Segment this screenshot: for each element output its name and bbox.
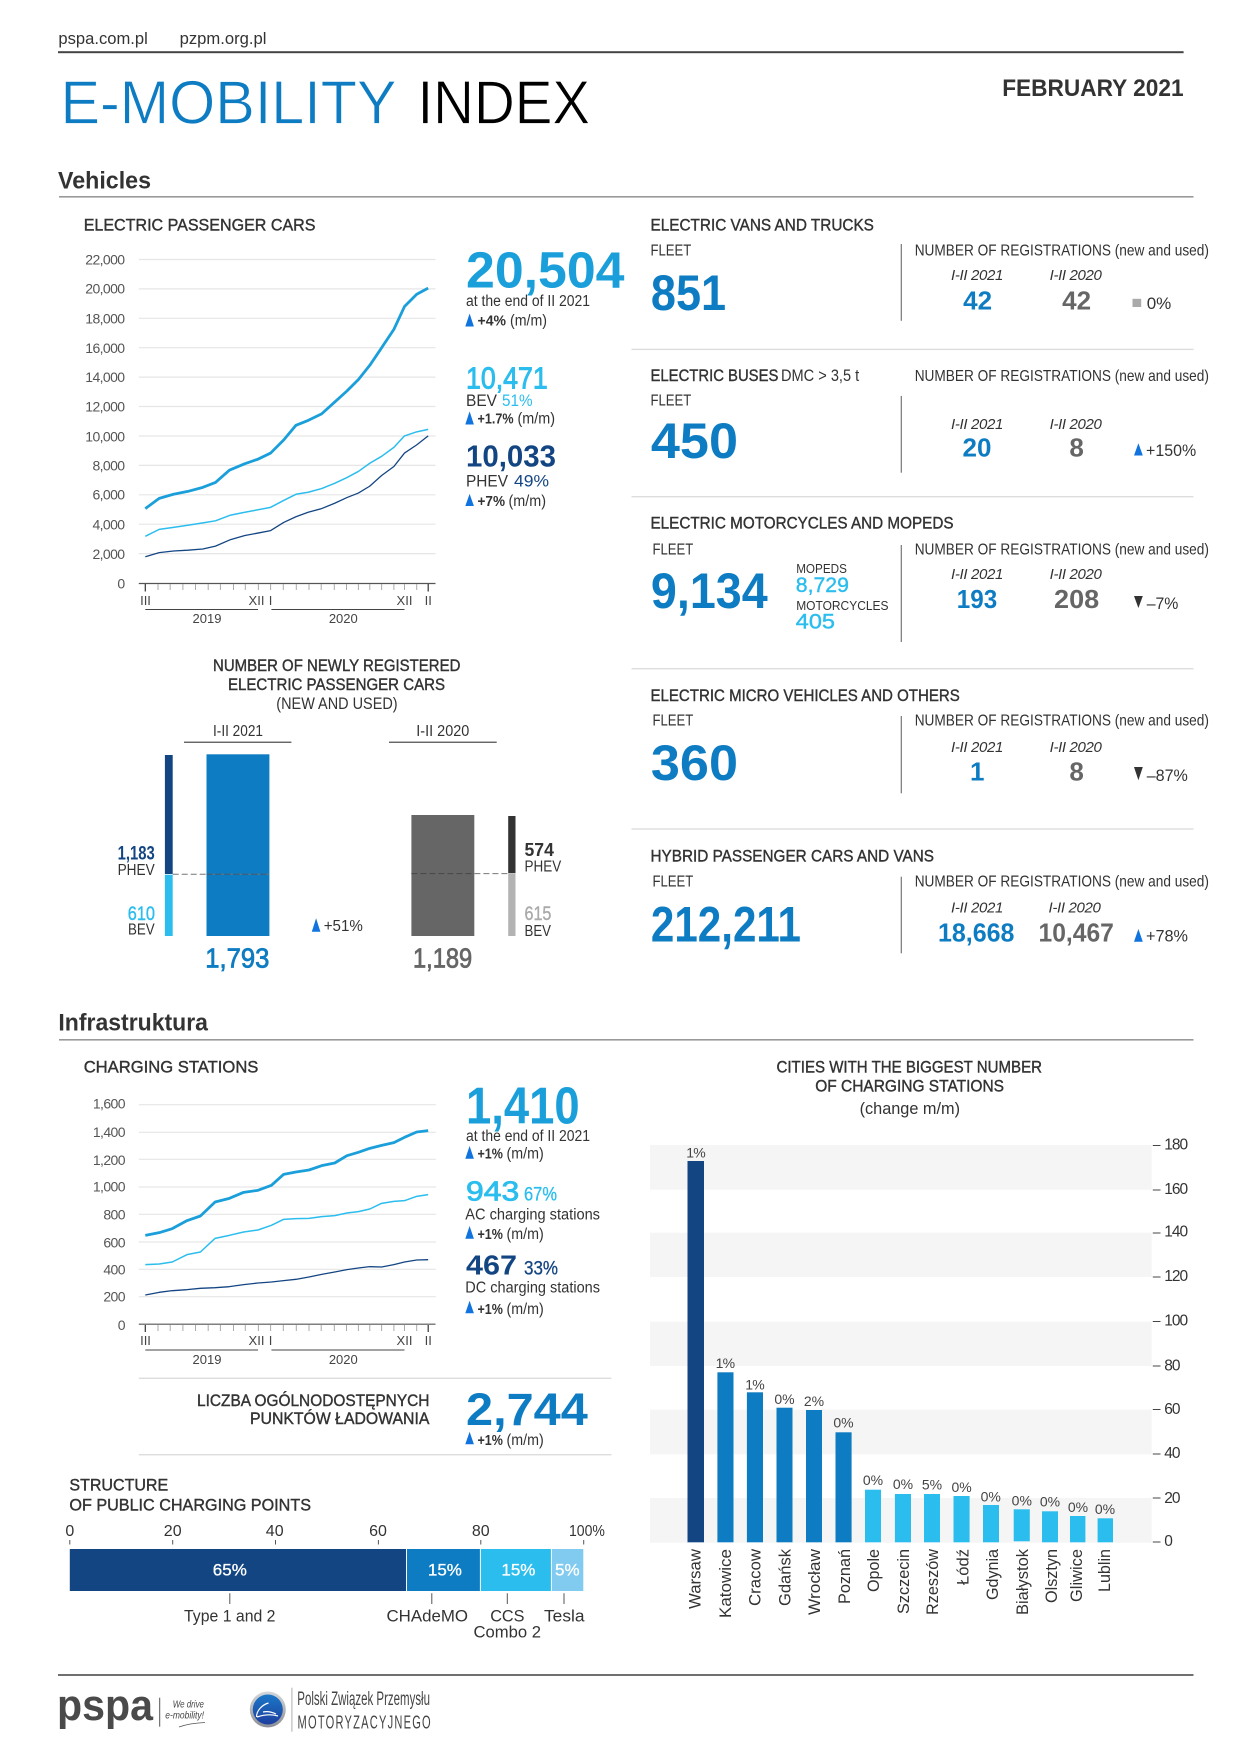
- panel: charging totals: (m/m): [506, 1226, 544, 1243]
- line: BEV: [145, 429, 428, 536]
- chart title: CITIES WITH THE BIGGEST NUMBER: [776, 1058, 1042, 1077]
- x axis labels: I: [269, 1333, 272, 1348]
- percentage labels: 0%: [951, 1479, 972, 1495]
- panel: motorcycles and mopeds: ELECTRIC MOTORCYCLES AND MOPEDS: [650, 514, 954, 533]
- total 1,189: 1,189: [413, 942, 472, 974]
- labels: 2020 split: BEV: [524, 923, 551, 940]
- icon: up triangle: [465, 1301, 474, 1313]
- icon: up triangle: [1134, 443, 1143, 456]
- panel: charging stations chart: [84, 1058, 436, 1367]
- labels: 2021 split: BEV: [128, 921, 155, 938]
- y axis: 160: [1164, 1181, 1189, 1198]
- x axis labels: 2019: [193, 1352, 221, 1367]
- icon: up triangle: [465, 1146, 474, 1159]
- panel: motorcycles and mopeds: I-II 2020: [1050, 566, 1103, 583]
- panel: fleet totals: (m/m): [518, 411, 555, 428]
- icon: no change square: [1132, 299, 1141, 307]
- heading: Infrastruktura: Infrastruktura: [58, 1010, 209, 1037]
- y axis: 100: [1164, 1312, 1189, 1330]
- header links: pspa.com.pl: [58, 30, 148, 48]
- percentage labels: 1%: [716, 1355, 735, 1371]
- labels: 2021 split: PHEV: [118, 862, 155, 879]
- bar labels: CHAdeMO: [386, 1607, 468, 1626]
- y axis: 20: [1164, 1490, 1181, 1507]
- city labels: Gliwice: [1067, 1549, 1086, 1602]
- labels: 2020 split: 574: [524, 840, 554, 860]
- panel: vans and trucks: [650, 216, 1209, 321]
- y axis labels: 12,000: [85, 398, 125, 414]
- chart title: OF CHARGING STATIONS: [815, 1077, 1004, 1096]
- percentage labels: 0%: [893, 1476, 913, 1492]
- city labels: Gdynia: [983, 1548, 1002, 1600]
- percentage labels: 5%: [922, 1477, 942, 1493]
- panel: fleet totals: PHEV: [466, 472, 509, 490]
- panel: cities chart: [650, 1058, 1189, 1618]
- logo: PZPM: [250, 1688, 431, 1733]
- city labels: Gdańsk: [776, 1549, 795, 1606]
- chart title: [776, 1058, 1042, 1118]
- bars: [688, 1161, 1113, 1542]
- mopeds and motorcycles split: 8,729: [796, 574, 849, 597]
- chart title: (NEW AND USED): [276, 694, 398, 713]
- panel: charging totals: (m/m): [506, 1146, 544, 1163]
- icon: up triangle: [465, 1432, 474, 1444]
- x axis labels: II: [425, 593, 432, 608]
- percentage labels: 1%: [745, 1376, 764, 1392]
- total 1,410: 1,410: [466, 1077, 580, 1135]
- chart title: ELECTRIC PASSENGER CARS: [84, 216, 316, 235]
- AC 943: 943: [466, 1176, 519, 1207]
- mopeds and motorcycles split: [796, 561, 889, 634]
- panel: charging totals: AC charging stations: [465, 1206, 600, 1223]
- bar labels: [184, 1607, 585, 1642]
- panel: vans and trucks: I-II 2021: [951, 267, 1003, 284]
- panel: fleet totals: +7%: [478, 493, 505, 510]
- header links: [58, 30, 267, 48]
- y axis labels: 800: [103, 1207, 126, 1223]
- panel: micro vehicles: ELECTRIC MICRO VEHICLES AND OTHERS: [650, 686, 960, 705]
- logo: pspa: We drive: [173, 1700, 204, 1711]
- panel: buses: FLEET: [650, 392, 691, 409]
- x axis labels: III: [140, 593, 151, 608]
- bar labels: Combo 2: [474, 1623, 541, 1642]
- panel: public charging points: PUNKTÓW ŁADOWANIA: [250, 1409, 430, 1428]
- stacked split: 2021: [165, 755, 173, 936]
- labels: 2020 split: [524, 840, 561, 940]
- BEV 10,471: 10,471: [466, 361, 548, 396]
- line: DC: [145, 1260, 428, 1295]
- logo: PZPM: MOTORYZACYJNEGO: [298, 1713, 431, 1733]
- city labels: Warsaw: [686, 1548, 705, 1609]
- x axis labels: III: [140, 1333, 151, 1348]
- icon: up triangle: [465, 411, 474, 424]
- stacked bar: 65%: [213, 1560, 247, 1580]
- y axis labels: [85, 251, 125, 591]
- panel: newly registered cars: I-II 2021: [213, 723, 263, 740]
- fleet value: 450: [651, 413, 738, 469]
- mopeds and motorcycles split: MOPEDS: [796, 561, 847, 576]
- city labels: Wrocław: [805, 1548, 824, 1615]
- title: INDEX: [418, 68, 590, 136]
- panel: motorcycles and mopeds: I-II 2021: [951, 566, 1003, 583]
- axis labels: 40: [266, 1523, 284, 1540]
- stacked bar: [70, 1549, 583, 1591]
- line: total fleet: [145, 288, 428, 509]
- panel: hybrid cars and vans: 18,668: [938, 918, 1014, 948]
- city labels: Poznań: [835, 1549, 854, 1604]
- y axis: 180: [1164, 1136, 1189, 1154]
- panel: charging totals: DC charging stations: [465, 1279, 600, 1296]
- header links: pzpm.org.pl: [180, 30, 266, 48]
- axis labels: 80: [472, 1523, 490, 1540]
- y axis labels: 20,000: [85, 281, 125, 297]
- chart title: [213, 656, 460, 713]
- panel: buses: I-II 2021: [951, 416, 1003, 433]
- panel: fleet totals: +4%: [478, 313, 506, 330]
- panel: structure of public charging points: [65, 1476, 605, 1642]
- logo: PZPM: Polski Związek Przemysłu: [297, 1689, 430, 1710]
- panel: buses: +150%: [1146, 441, 1196, 460]
- bar labels: Tesla: [544, 1607, 585, 1626]
- panel: vans and trucks: 42: [963, 285, 992, 315]
- icon: emblem: [250, 1692, 286, 1728]
- panel: charging totals: 33%: [524, 1258, 558, 1279]
- y axis labels: 4,000: [92, 516, 125, 532]
- change indicator: +51%: [324, 918, 363, 935]
- panel: buses: [650, 366, 1209, 473]
- labels: 2020 split: 615: [524, 904, 551, 925]
- percentage labels: 0%: [1068, 1499, 1088, 1515]
- x axis labels: 2019: [193, 611, 221, 626]
- y axis: 120: [1164, 1268, 1189, 1285]
- y axis: 0: [1164, 1533, 1173, 1550]
- y axis labels: 8,000: [92, 457, 125, 473]
- percentage labels: [686, 1144, 1115, 1517]
- panel: micro vehicles: –87%: [1147, 766, 1188, 785]
- chart title: (change m/m): [860, 1099, 960, 1118]
- city labels: Szczecin: [894, 1549, 913, 1614]
- panel: micro vehicles: I-II 2020: [1050, 739, 1103, 756]
- x axis labels: [140, 593, 432, 626]
- y axis labels: 600: [103, 1234, 126, 1250]
- axis labels: 100%: [569, 1523, 605, 1540]
- date: FEBRUARY 2021: [1002, 75, 1184, 102]
- stacked bar: 5%: [555, 1560, 580, 1580]
- panel: public charging points: +1%: [478, 1432, 503, 1449]
- city labels: Rzeszów: [923, 1548, 942, 1615]
- percentage labels: 0%: [981, 1488, 1001, 1504]
- city labels: [686, 1548, 1114, 1618]
- x axis labels: XII: [249, 1333, 264, 1348]
- panel: vans and trucks: ELECTRIC VANS AND TRUCKS: [650, 216, 874, 235]
- panel: micro vehicles: 8: [1069, 756, 1084, 786]
- chart title: ELECTRIC PASSENGER CARS: [228, 675, 445, 694]
- total 2,744: 2,744: [466, 1384, 588, 1435]
- x axis labels: 2020: [329, 611, 358, 626]
- icon: up triangle: [465, 314, 474, 326]
- panel: micro vehicles: [650, 686, 1209, 793]
- y axis: 60: [1164, 1401, 1181, 1418]
- panel: fleet totals: 49%: [514, 472, 549, 490]
- PHEV 10,033: 10,033: [466, 438, 556, 474]
- panel: buses: 20: [963, 433, 991, 463]
- panel: vans and trucks: 0%: [1147, 294, 1171, 313]
- panel: hybrid cars and vans: FLEET: [652, 874, 693, 891]
- panel: hybrid cars and vans: I-II 2021: [951, 899, 1003, 916]
- y axis labels: 10,000: [85, 428, 125, 444]
- y axis: 140: [1164, 1224, 1189, 1240]
- panel: charging totals: +1%: [478, 1226, 503, 1243]
- panel: electric passenger cars fleet chart: [84, 216, 435, 626]
- percentage labels: 0%: [863, 1472, 883, 1488]
- panel: hybrid cars and vans: [650, 846, 1209, 953]
- panel: charging totals: at the end of II 2021: [466, 1128, 590, 1145]
- panel: motorcycles and mopeds: FLEET: [652, 542, 693, 559]
- stacked bar: 15%: [501, 1560, 535, 1580]
- icon: down triangle: [1134, 767, 1143, 780]
- y axis labels: 200: [103, 1289, 126, 1305]
- axis labels: [65, 1523, 605, 1540]
- panel: hybrid cars and vans: 10,467: [1039, 918, 1114, 948]
- y axis labels: 400: [103, 1261, 126, 1277]
- labels: 2021 split: 1,183: [118, 843, 155, 864]
- city labels: Łódź: [954, 1549, 972, 1585]
- chart title: OF PUBLIC CHARGING POINTS: [69, 1496, 311, 1515]
- y axis labels: 2,000: [92, 546, 125, 562]
- icon: up triangle: [465, 494, 474, 506]
- percentage labels: 0%: [1012, 1492, 1032, 1508]
- panel: fleet totals: (m/m): [508, 493, 546, 510]
- panel: hybrid cars and vans: HYBRID PASSENGER CARS AND VANS: [650, 846, 934, 865]
- percentage labels: 0%: [1040, 1494, 1060, 1510]
- panel: buses: I-II 2020: [1050, 416, 1103, 433]
- y axis: 80: [1164, 1358, 1181, 1374]
- line: AC: [145, 1195, 428, 1265]
- total 20,504: 20,504: [466, 241, 625, 298]
- percentage labels: 1%: [686, 1144, 705, 1160]
- percentage labels: 0%: [833, 1415, 854, 1431]
- panel: vans and trucks: FLEET: [650, 242, 691, 260]
- panel: motorcycles and mopeds: 193: [957, 584, 997, 614]
- panel: public charging points: [197, 1384, 588, 1449]
- percentage labels: 0%: [774, 1391, 795, 1407]
- panel: vans and trucks: I-II 2020: [1050, 267, 1103, 284]
- fleet value: 9,134: [651, 563, 768, 619]
- y axis labels: 22,000: [85, 251, 125, 267]
- chart title: NUMBER OF NEWLY REGISTERED: [213, 656, 460, 675]
- panel: charging totals: (m/m): [506, 1301, 544, 1318]
- logo: pspa: pspa: [57, 1681, 153, 1730]
- chart title: [69, 1476, 311, 1515]
- title: [60, 68, 590, 136]
- panel: fleet totals: +1.7%: [478, 411, 514, 428]
- y axis: [1153, 1136, 1189, 1550]
- panel: hybrid cars and vans: I-II 2020: [1049, 899, 1101, 916]
- city labels: Cracow: [746, 1548, 765, 1606]
- heading: Vehicles: Vehicles: [58, 168, 151, 195]
- panel: vans and trucks: 42: [1062, 285, 1091, 315]
- stacked bar: 15%: [428, 1560, 462, 1580]
- DC 467: 467: [466, 1249, 517, 1280]
- fleet value: 212,211: [651, 897, 801, 953]
- title: E-MOBILITY: [60, 68, 396, 136]
- panel: hybrid cars and vans: +78%: [1146, 927, 1188, 946]
- bar labels: Type 1 and 2: [184, 1607, 276, 1626]
- x axis labels: [140, 1333, 432, 1367]
- y axis labels: 18,000: [85, 310, 125, 326]
- mopeds and motorcycles split: 405: [796, 611, 835, 634]
- y axis labels: 1,200: [93, 1152, 126, 1168]
- y axis labels: [93, 1096, 126, 1333]
- y axis labels: 6,000: [92, 487, 125, 503]
- panel: public charging points: (m/m): [506, 1432, 544, 1449]
- x axis labels: XII: [397, 593, 412, 608]
- panel: buses: ELECTRIC BUSES: [650, 366, 778, 385]
- panel: buses: 8: [1069, 433, 1084, 463]
- x axis labels: 2020: [329, 1352, 358, 1367]
- y axis labels: 1,000: [93, 1178, 126, 1194]
- labels: 2021 split: 610: [128, 904, 155, 925]
- percentage labels: 2%: [804, 1393, 824, 1409]
- stacked split: 2020: [508, 816, 516, 936]
- panel: charging totals: +1%: [478, 1301, 503, 1318]
- mopeds and motorcycles split: MOTORCYCLES: [796, 598, 889, 613]
- icon: up triangle: [1134, 929, 1143, 942]
- line: PHEV: [145, 436, 428, 557]
- city labels: Olsztyn: [1042, 1549, 1061, 1603]
- logo: pspa: [57, 1681, 205, 1730]
- y axis labels: 0: [117, 575, 125, 591]
- panel: charging totals: +1%: [478, 1146, 503, 1163]
- labels: 2021 split: [118, 843, 155, 938]
- x axis labels: XII: [249, 593, 264, 608]
- bar labels: CCS: [490, 1607, 524, 1626]
- axis labels: 60: [369, 1523, 387, 1540]
- city labels: Lublin: [1095, 1549, 1114, 1592]
- panel: charging totals: 67%: [524, 1185, 557, 1206]
- logo: pspa: e-mobility!: [165, 1710, 204, 1721]
- y axis labels: 1,400: [93, 1124, 126, 1140]
- x axis labels: II: [425, 1333, 432, 1348]
- y axis labels: 1,600: [93, 1096, 126, 1112]
- panel: charging totals: [465, 1077, 600, 1318]
- panel: fleet totals: BEV: [466, 391, 498, 410]
- chart title: CHARGING STATIONS: [84, 1058, 258, 1077]
- bar: 2020 total: [411, 815, 474, 936]
- bar: 2021 total: [206, 754, 269, 936]
- y axis labels: 16,000: [85, 340, 125, 356]
- panel: motorcycles and mopeds: [650, 514, 1209, 642]
- panel: micro vehicles: 1: [970, 756, 984, 786]
- percentage labels: 0%: [1095, 1501, 1115, 1517]
- city labels: Katowice: [716, 1549, 735, 1618]
- panel: fleet totals: (m/m): [510, 313, 547, 330]
- city labels: Białystok: [1013, 1549, 1032, 1615]
- panel: fleet totals: 51%: [502, 391, 533, 410]
- y axis labels: 14,000: [85, 369, 125, 385]
- icon: up triangle: [465, 1226, 474, 1239]
- labels: 2020 split: PHEV: [524, 859, 561, 876]
- axis labels: 0: [65, 1523, 74, 1540]
- panel: fleet totals: at the end of II 2021: [466, 293, 590, 310]
- chart title: STRUCTURE: [69, 1476, 168, 1495]
- panel: fleet totals: [465, 241, 625, 510]
- axis labels: 20: [164, 1523, 182, 1540]
- fleet value: 851: [651, 265, 726, 321]
- fleet value: 360: [651, 735, 738, 791]
- panel: motorcycles and mopeds: 208: [1054, 584, 1099, 614]
- panel: newly registered cars: [118, 656, 561, 974]
- line: total stations: [145, 1131, 428, 1235]
- panel: motorcycles and mopeds: –7%: [1147, 594, 1178, 613]
- panel: buses: DMC > 3,5 t: [781, 366, 859, 385]
- panel: micro vehicles: I-II 2021: [951, 739, 1003, 756]
- y axis: 40: [1164, 1445, 1181, 1462]
- x axis labels: I: [269, 593, 272, 608]
- total 1,793: 1,793: [205, 942, 269, 974]
- panel: newly registered cars: I-II 2020: [416, 723, 469, 740]
- panel: public charging points: LICZBA OGÓLNODOSTĘPNYCH: [197, 1391, 429, 1410]
- icon: down triangle: [1134, 596, 1143, 608]
- city labels: Opole: [864, 1549, 883, 1592]
- y axis labels: 0: [118, 1317, 126, 1333]
- x axis labels: XII: [397, 1333, 412, 1348]
- panel: micro vehicles: FLEET: [652, 712, 693, 729]
